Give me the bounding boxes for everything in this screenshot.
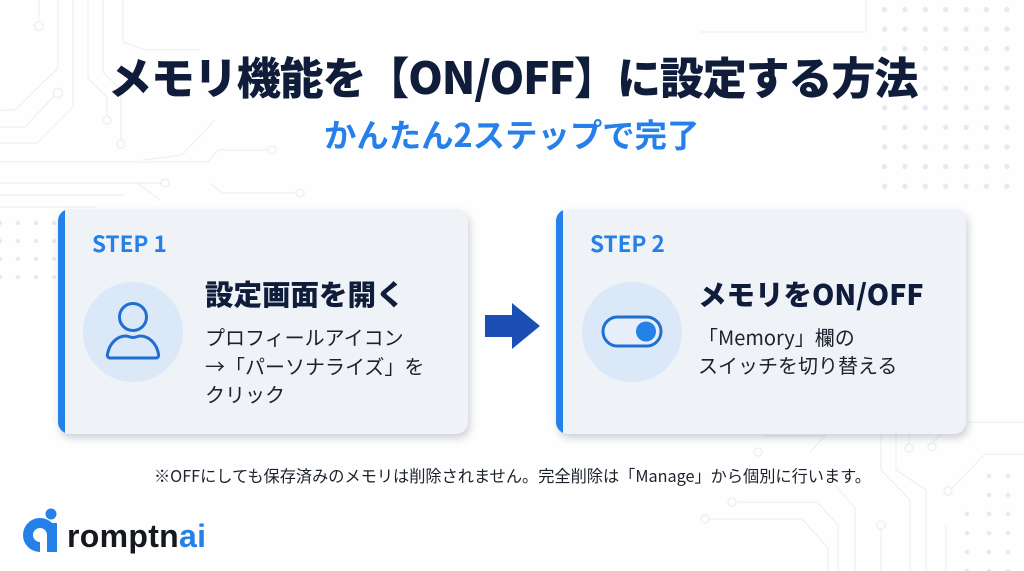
subtitle: かんたん2ステップで完了: [324, 110, 699, 157]
step 1 description: プロフィールアイコン: [205, 322, 404, 351]
footnote: ※OFFにしても保存済みのメモリは削除されません。完全削除は「Manage」から個別に行います。: [154, 463, 871, 487]
step 1 heading: 設定画面を開く: [205, 273, 405, 314]
logo wordmark: romptnai: [67, 518, 206, 554]
icon: profile: [83, 282, 183, 382]
step 2 label: STEP 2: [590, 227, 665, 259]
icon: toggle switch: [582, 282, 682, 382]
step 2 description: スイッチを切り替える: [698, 350, 897, 379]
panel: step 1: [58, 209, 468, 434]
step 1 description: →「パーソナライズ」を: [205, 350, 424, 380]
title: メモリ機能を【ON/OFF】に設定する方法: [108, 43, 917, 107]
step 1 label: STEP 1: [92, 227, 167, 259]
step 2 description: [698, 322, 897, 379]
logo: [23, 508, 206, 554]
step 2 heading: メモリをON/OFF: [698, 273, 924, 314]
step 1 description: クリック: [205, 379, 285, 408]
arrow: [485, 303, 540, 349]
icon: logo mark: [23, 508, 57, 552]
panel: step 2: [556, 209, 966, 434]
step 1 description: [205, 322, 424, 408]
step 2 description: 「Memory」欄の: [698, 322, 855, 351]
